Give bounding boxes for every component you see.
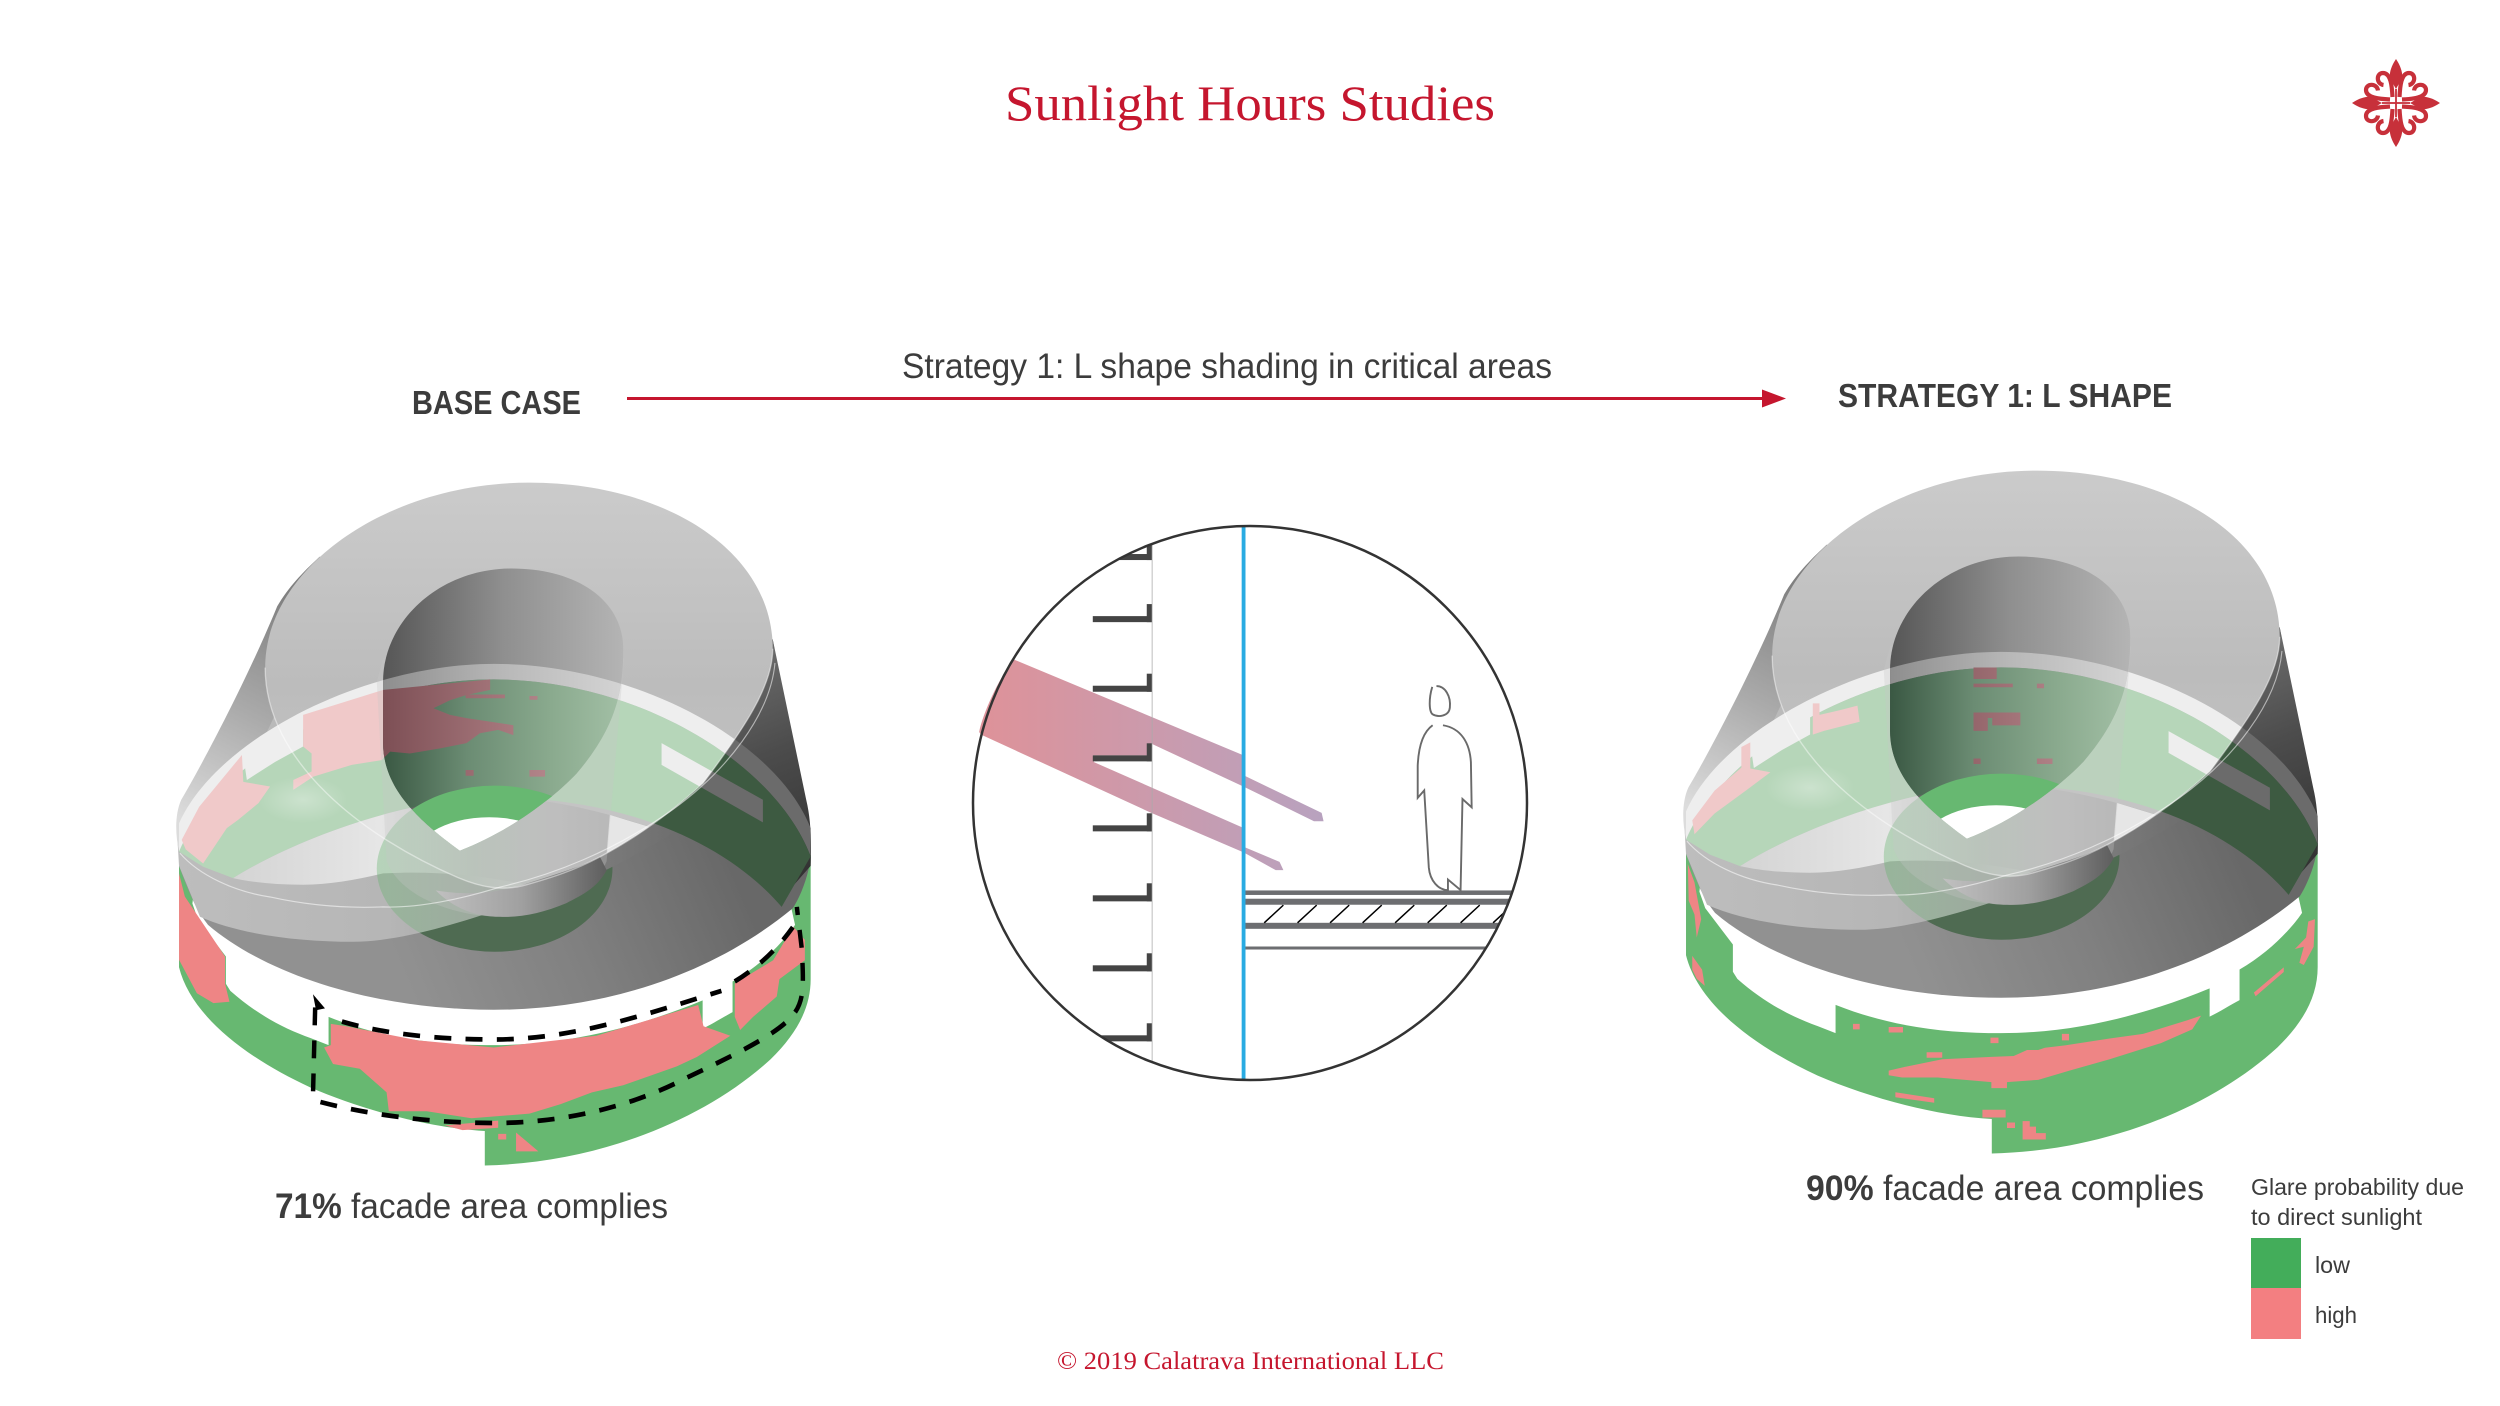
building: strategy 1: [1683, 471, 2318, 1153]
sun beam: [979, 659, 1324, 870]
legend: Glare probability due: [2251, 1174, 2464, 1200]
band: rear facade seen through glass: [1686, 652, 2318, 895]
heading: strategy arrow label: Strategy 1: L shape shading in critical areas: [902, 347, 1552, 386]
title: Sunlight Hours Studies: [1005, 75, 1495, 131]
caption: base case: 71% facade area complies: [275, 1187, 668, 1226]
logo: red cross fleury: [2352, 59, 2440, 147]
building: base case: [176, 483, 811, 1165]
person figure: [1418, 686, 1472, 890]
caption: strategy 1: 90% facade area complies: [1806, 1169, 2204, 1208]
arrow: base case to strategy: [627, 390, 1786, 408]
glass line: [1242, 521, 1245, 1086]
dashed outline: critical area: [313, 907, 803, 1123]
heading: strategy 1: STRATEGY 1: L SHAPE: [1838, 377, 2172, 414]
band: rear facade seen through glass: [179, 664, 811, 907]
floor slab: [1245, 890, 1513, 950]
facade: high glare patches: [1688, 864, 2315, 1140]
facade: high glare patches: [179, 873, 805, 1151]
heading: base case: BASE CASE: [412, 384, 581, 421]
legend: low: [2315, 1252, 2350, 1278]
legend: [2251, 1174, 2464, 1339]
section detail circle: [973, 521, 1527, 1086]
legend: high: [2315, 1302, 2357, 1328]
copyright: © 2019 Calatrava International LLC: [1057, 1348, 1444, 1375]
facade fins: [1093, 542, 1152, 1041]
legend: to direct sunlight: [2251, 1204, 2423, 1230]
